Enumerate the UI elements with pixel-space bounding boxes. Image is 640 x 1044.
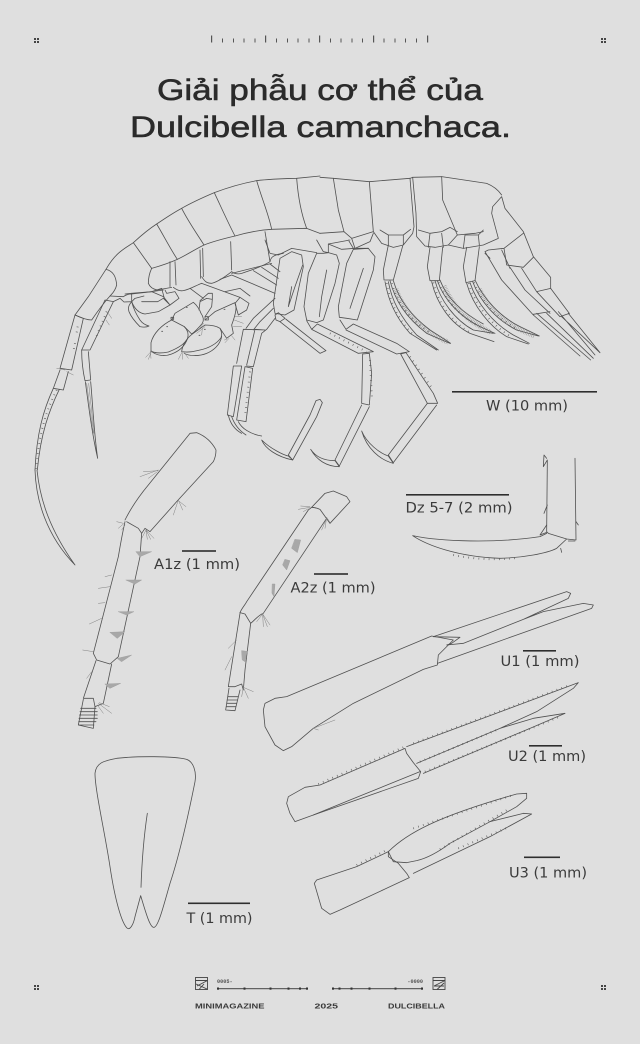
telson T (95, 757, 195, 929)
scale U3: U3 (1 mm) (509, 866, 587, 882)
title (130, 74, 511, 144)
footer ruler right (332, 979, 423, 990)
uropod U1 (263, 592, 593, 751)
scale A1z (154, 550, 240, 573)
scale U3 (509, 856, 587, 882)
head, thorax and antennae (35, 176, 320, 470)
footer text: publication: MINIMAGAZINE (195, 1002, 264, 1010)
long antenna flagellum tip (35, 470, 75, 565)
footer ruler right: -0000 (407, 979, 423, 985)
antenna detail A2z (225, 491, 350, 711)
antenna detail A1z (78, 433, 216, 728)
footer icon right (433, 978, 445, 990)
uropod U2 (287, 683, 578, 822)
scale A2z: A2z (1 mm) (290, 580, 376, 596)
leg detail Dz 5-7 (413, 455, 578, 559)
uropods U1, U2, U3 (263, 592, 593, 914)
title: Giải phẫu cơ thể của (157, 74, 483, 107)
scale U2: U2 (1 mm) (508, 749, 586, 765)
title: Dulcibella camanchaca. (130, 111, 511, 144)
abdomen, pleopods and uropods (320, 177, 600, 360)
scale U1: U1 (1 mm) (500, 654, 580, 670)
scale A2z (290, 573, 376, 596)
uropod U3 (314, 793, 532, 914)
scale Dz 5-7 (406, 494, 512, 516)
gnathopods (125, 283, 250, 359)
scale T: T (1 mm) (185, 911, 252, 927)
walking legs (220, 240, 438, 467)
footer icon left (196, 978, 208, 990)
whole-body amphipod drawing (35, 176, 600, 565)
scale A1z: A1z (1 mm) (154, 557, 240, 573)
footer text: subject: DULCIBELLA (388, 1002, 446, 1010)
footer ruler left (217, 979, 308, 990)
scale W: W (10 mm) (486, 398, 568, 414)
footer ruler left: 0005- (217, 979, 233, 985)
scale T (185, 902, 252, 927)
footer text: year: 2025 (314, 1002, 339, 1010)
scale Dz 5-7: Dz 5-7 (2 mm) (406, 500, 512, 516)
top ruler (211, 36, 428, 42)
